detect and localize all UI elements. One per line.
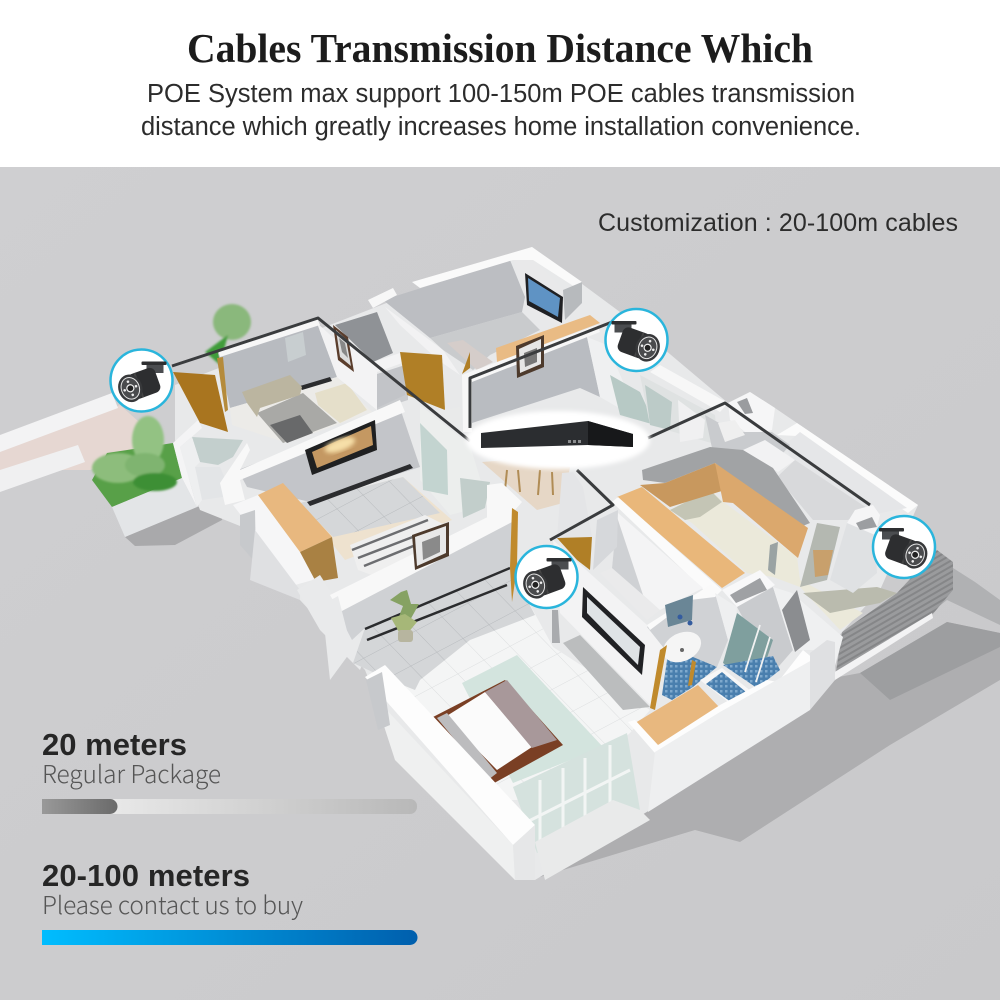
plant pot: [398, 630, 413, 642]
header background: [0, 0, 1000, 167]
left patio: [0, 304, 251, 537]
tv wall and bathroom: [552, 472, 843, 710]
wall: [553, 540, 667, 710]
plant: [390, 590, 419, 634]
title: Cables Transmission Distance Which: [187, 25, 813, 71]
door: [400, 352, 445, 410]
small blue floor: [700, 668, 752, 705]
back wall: [383, 260, 525, 338]
contact label: Please contact us to buy: [42, 887, 303, 922]
camera: top: [606, 309, 668, 371]
right wing wall: [650, 365, 728, 412]
rack: [563, 635, 650, 710]
blue bar: [42, 930, 418, 945]
base floor: [175, 247, 918, 880]
bed: [350, 515, 445, 578]
picture: [412, 522, 449, 570]
grey bar: [42, 799, 417, 814]
back wall: [335, 520, 512, 640]
terrace slat wall: [833, 613, 933, 680]
camera: right: [873, 516, 935, 578]
orange wall top: [635, 685, 720, 747]
column box: [830, 513, 877, 593]
20-100 meters label: 20-100 meters: [42, 858, 250, 893]
regular package label: Regular Package: [42, 756, 221, 791]
terrace floor: [535, 800, 650, 880]
planter box: [112, 478, 197, 537]
bathroom dark wall: [335, 312, 393, 362]
room floor: [430, 312, 540, 370]
rug: [257, 393, 337, 443]
worktop block: [743, 440, 795, 472]
20 meters label: 20 meters: [42, 727, 187, 762]
camera: bottom: [516, 546, 578, 608]
table: [270, 415, 313, 443]
picture: [333, 325, 354, 372]
wall TV: [582, 587, 645, 675]
grey wall: [472, 337, 600, 423]
shadows: [125, 505, 1000, 880]
window on back wall: [285, 332, 306, 362]
rear room: [600, 568, 660, 620]
green rug: [462, 655, 603, 783]
cabinets: [640, 463, 725, 507]
left wall block: [233, 495, 320, 585]
sink: [658, 626, 706, 668]
back walls: [777, 423, 918, 513]
tv bedroom: [220, 400, 452, 670]
subtitle: POE System max support 100-150m POE cables transmission: [147, 80, 855, 108]
NVR recorder: [466, 411, 650, 469]
plants: [92, 304, 251, 491]
entrance walls: [192, 437, 243, 465]
wall TV: [525, 273, 563, 323]
cables: [172, 318, 870, 540]
centre glass hall: [420, 405, 570, 518]
counter: [642, 447, 810, 530]
top centre rooms: [333, 247, 655, 432]
sofas: [242, 375, 302, 417]
subtitle: distance which greatly increases home installation convenience.: [141, 113, 861, 141]
orange strip: [617, 487, 745, 588]
floor plan illustration: [0, 247, 1000, 880]
customization note: Customization : 20-100m cables: [598, 209, 958, 237]
living room: [173, 318, 408, 443]
oven: [718, 420, 745, 442]
bathroom: [647, 593, 728, 683]
glass door: [800, 523, 840, 587]
bedroom outer wall: [365, 665, 535, 845]
front walls: [365, 640, 835, 880]
diagonal wall: [385, 307, 460, 375]
kitchen: [612, 415, 918, 630]
door edges: [650, 645, 667, 710]
picture: [516, 335, 544, 378]
door edge: [510, 508, 518, 602]
main bedroom: [322, 505, 650, 800]
orange wall top: [496, 315, 600, 362]
fireplace TV: [305, 420, 377, 475]
wall end block: [487, 483, 522, 520]
floor: [670, 490, 863, 630]
subtitle: [141, 80, 861, 141]
dining rug: [482, 460, 570, 510]
camera: left: [110, 350, 172, 412]
right terrace mesh: [835, 550, 953, 678]
door: [173, 372, 228, 432]
window wall: [513, 733, 650, 880]
bed: [433, 680, 563, 787]
shower: [737, 587, 793, 673]
